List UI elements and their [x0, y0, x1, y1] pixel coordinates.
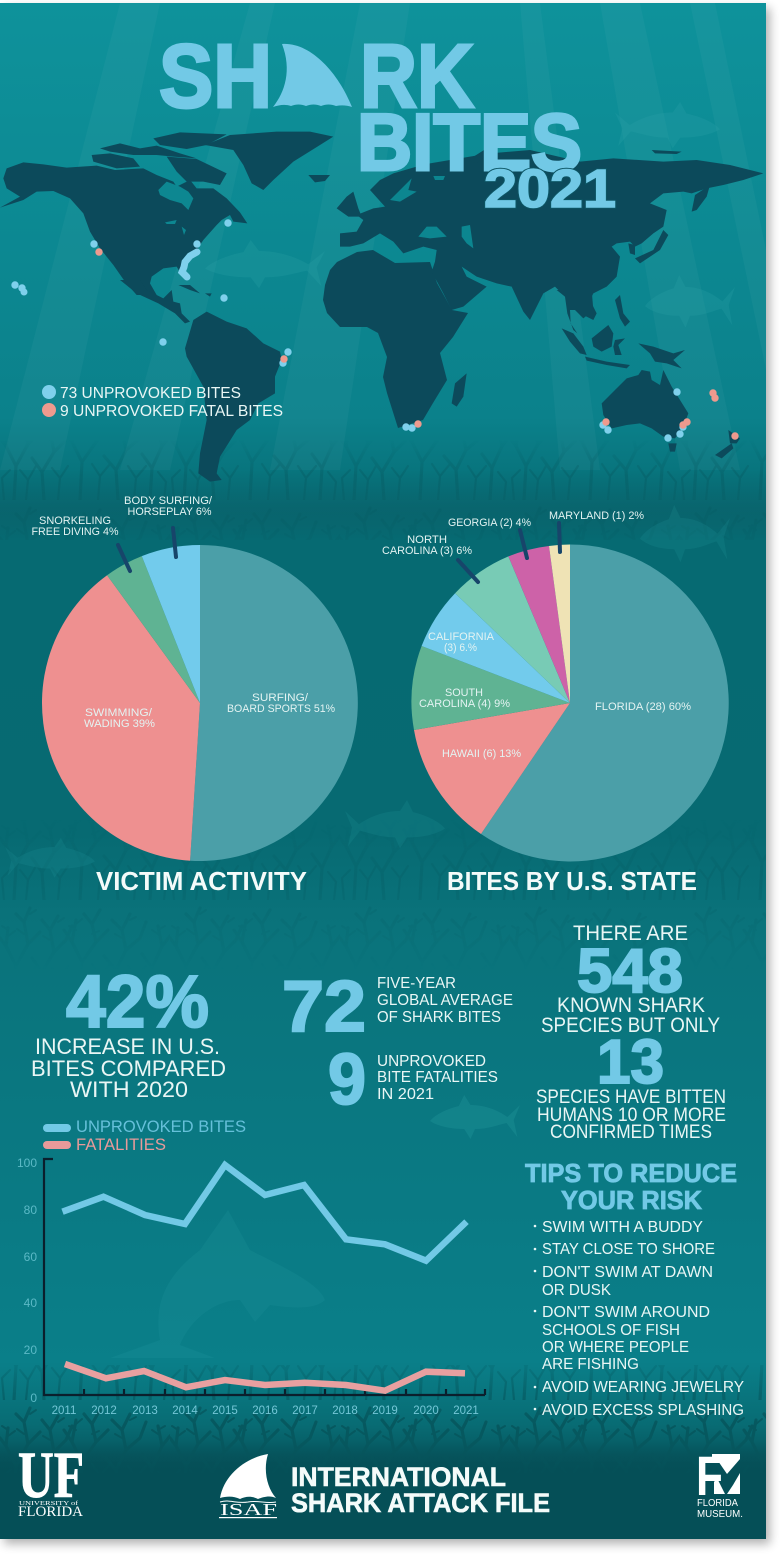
logo: ISAF fin — [219, 1454, 277, 1519]
pie chart: bites by state: SOUTH — [445, 687, 483, 699]
stat: 42 percent — [31, 960, 226, 1102]
line chart: 2020 — [413, 1405, 439, 1417]
stat: 42 percent: INCREASE IN U.S. — [35, 1034, 220, 1059]
pie chart: victim activity: BODY SURFING/ — [124, 495, 213, 507]
tips panel: TIPS TO REDUCE — [525, 1158, 737, 1188]
heading: International Shark Attack File — [291, 1462, 550, 1518]
stat: 9 fatalities: 9 — [328, 1040, 366, 1120]
line chart: 20 — [24, 1343, 37, 1357]
pie chart: bites by state: (3) 6.% — [444, 642, 477, 654]
title: SH — [159, 27, 272, 127]
pie chart: victim activity: SNORKELING — [39, 515, 111, 527]
stat: 42 percent: 42% — [66, 960, 209, 1043]
inland water: seas — [390, 176, 473, 248]
chart legend: FATALITIES — [76, 1135, 166, 1154]
stat: species — [536, 922, 726, 1143]
tips panel: SWIM WITH A BUDDY — [542, 1219, 703, 1236]
title: RK — [360, 27, 474, 127]
pie chart: bites by state: GEORGIA (2) 4% — [448, 517, 531, 529]
heading: International Shark Attack File: INTERNATIONAL — [291, 1462, 506, 1492]
chart legend: UNPROVOKED BITES — [76, 1117, 246, 1136]
map legend: 9 UNPROVOKED FATAL BITES — [60, 403, 283, 420]
tips panel: ARE FISHING — [542, 1356, 639, 1373]
logo: University of Florida: FLORIDA — [18, 1504, 83, 1520]
stat: 72 average: FIVE-YEAR — [377, 975, 456, 992]
tips panel — [525, 1158, 744, 1419]
logo: University of Florida: UNIVERSITY of — [19, 1500, 79, 1507]
stat: 9 fatalities: IN 2021 — [377, 1086, 434, 1103]
pie chart: bites by state: CALIFORNIA — [428, 631, 495, 643]
stat: species: 548 — [577, 937, 683, 1006]
logo: University of Florida — [18, 1439, 84, 1520]
pie chart: bites by state: FLORIDA (28) 60% — [595, 701, 691, 713]
map markers — [11, 219, 739, 442]
title — [159, 27, 616, 219]
tips panel: OR DUSK — [542, 1282, 612, 1299]
stat: 72 average: OF SHARK BITES — [377, 1009, 501, 1026]
heading: bites by US state: BITES BY U.S. STATE — [447, 866, 697, 896]
stat: species: KNOWN SHARK — [557, 994, 705, 1017]
line chart: 2016 — [252, 1405, 278, 1417]
stat: species: 13 — [597, 1028, 664, 1097]
stat: 72 average — [282, 967, 513, 1047]
line chart — [17, 1156, 485, 1417]
stat: 9 fatalities: BITE FATALITIES — [377, 1069, 498, 1086]
logo: University of Florida: UF — [18, 1439, 84, 1512]
world map — [0, 132, 763, 482]
pie chart: bites by state: CAROLINA (4) 9% — [419, 698, 510, 710]
line chart: 2018 — [332, 1405, 358, 1417]
line chart: 2013 — [132, 1405, 158, 1417]
pie chart: bites by state: HAWAII (6) 13% — [442, 748, 521, 760]
pie chart: victim activity — [32, 495, 358, 861]
pie chart: bites by state: NORTH — [407, 534, 447, 546]
line chart: 0 — [30, 1391, 37, 1405]
logo: Florida Museum: F — [696, 1444, 723, 1507]
stat: species: SPECIES BUT ONLY — [541, 1014, 720, 1037]
line chart: 2014 — [172, 1405, 198, 1417]
heading: victim activity: VICTIM ACTIVITY — [96, 866, 307, 896]
tips panel: YOUR RISK — [561, 1185, 702, 1215]
heading: International Shark Attack File: SHARK ATTACK FILE — [291, 1488, 550, 1518]
tips panel: AVOID EXCESS SPLASHING — [542, 1402, 744, 1419]
title: BITES — [357, 98, 582, 188]
stat: 42 percent: WITH 2020 — [70, 1077, 188, 1102]
line chart: 60 — [24, 1250, 37, 1264]
line chart: 100 — [17, 1156, 37, 1170]
logo: Florida Museum — [696, 1444, 743, 1520]
pie chart: victim activity: WADING 39% — [84, 718, 155, 730]
background sharks — [5, 102, 735, 1358]
stat: species: SPECIES HAVE BITTEN — [536, 1087, 726, 1108]
line chart: 2019 — [372, 1405, 398, 1417]
logo: Florida Museum: MUSEUM. — [697, 1509, 743, 1520]
stat: 9 fatalities: UNPROVOKED — [377, 1053, 486, 1070]
line chart: 2021 — [453, 1405, 479, 1417]
inland water: Hudson Bay and lakes — [158, 182, 193, 235]
tips panel: DON'T SWIM AT DAWN — [542, 1264, 713, 1281]
stat: species: CONFIRMED TIMES — [550, 1122, 712, 1143]
line chart: 2017 — [292, 1405, 318, 1417]
pie chart: victim activity: SURFING/ — [252, 692, 309, 704]
pie chart: bites by state: CAROLINA (3) 6% — [382, 545, 472, 557]
line chart: 80 — [24, 1203, 37, 1217]
pie chart: bites by state: MARYLAND (1) 2% — [549, 510, 644, 522]
line chart: 40 — [24, 1296, 37, 1310]
pie chart: victim activity: SWIMMING/ — [85, 707, 153, 719]
map legend — [42, 385, 283, 420]
stat: 42 percent: BITES COMPARED — [31, 1056, 226, 1081]
line chart: 2012 — [91, 1405, 117, 1417]
stat: species: THERE ARE — [573, 922, 688, 945]
stat: 72 average: 72 — [282, 967, 366, 1047]
line chart: 2015 — [212, 1405, 238, 1417]
stat: species: HUMANS 10 OR MORE — [537, 1105, 726, 1126]
stat: 9 fatalities — [328, 1040, 498, 1120]
pie chart: victim activity: BOARD SPORTS 51% — [227, 703, 335, 715]
icon: shark fin letter A — [273, 44, 352, 107]
pie chart: bites by state — [382, 510, 729, 861]
tips panel: OR WHERE PEOPLE — [542, 1339, 689, 1356]
logo: Florida Museum: FLORIDA — [697, 1498, 738, 1509]
logo: ISAF fin: ISAF — [220, 1500, 277, 1519]
pie chart: victim activity: FREE DIVING 4% — [32, 526, 119, 538]
tips panel: DON'T SWIM AROUND — [542, 1304, 710, 1321]
pie chart: victim activity: HORSEPLAY 6% — [128, 506, 212, 518]
chart legend — [43, 1117, 246, 1154]
map legend: 73 UNPROVOKED BITES — [60, 385, 241, 402]
tips panel: AVOID WEARING JEWELRY — [542, 1379, 744, 1396]
stat: 72 average: GLOBAL AVERAGE — [377, 992, 513, 1009]
title: 2021 — [484, 159, 616, 219]
line chart: 2011 — [52, 1405, 76, 1417]
tips panel: STAY CLOSE TO SHORE — [542, 1241, 715, 1258]
title: 2021 — [484, 159, 616, 219]
tips panel: SCHOOLS OF FISH — [542, 1322, 680, 1339]
